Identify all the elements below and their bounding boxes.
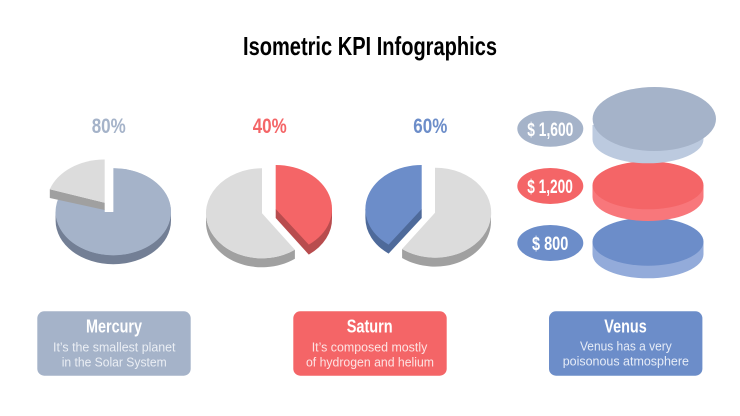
panel: Venus: poisonous atmosphere [563, 355, 689, 369]
pill: $ 1,200: $ 1,200 [527, 177, 573, 198]
panel: Saturn: Saturn [347, 317, 393, 337]
pill: $ 800: $ 800 [532, 234, 568, 255]
cylinder: red [592, 161, 704, 221]
pie chart: 60% Venus [365, 165, 491, 267]
panel: Mercury: It’s the smallest planet [53, 341, 176, 355]
pie chart: 80% Mercury [50, 159, 171, 264]
title: Isometric KPI Infographics [243, 31, 497, 61]
cylinder: grey-blue [592, 87, 716, 163]
KPI value: 80%: 80% [92, 115, 126, 138]
panel: Mercury: Mercury [86, 317, 142, 337]
pill: $ 800 [517, 225, 583, 261]
KPI value: 40%: 40% [253, 115, 287, 138]
panel: Mercury: in the Solar System [62, 355, 167, 369]
pie chart: 40% Saturn [206, 165, 332, 267]
pill: $ 1,200 [517, 168, 583, 204]
panel: Saturn [293, 311, 447, 376]
cylinder: blue [592, 218, 704, 278]
panel: Venus: Venus [604, 317, 647, 337]
panel: Saturn: It’s composed mostly [312, 341, 428, 355]
panel: Mercury [37, 311, 191, 376]
stacked cylinders [592, 87, 716, 278]
panel: Saturn: of hydrogen and helium [306, 355, 434, 369]
pill: $ 1,600 [517, 111, 583, 147]
panel: Venus: Venus has a very [580, 340, 672, 354]
KPI value: 60%: 60% [413, 115, 448, 138]
panel: Venus [549, 311, 702, 376]
pill: $ 1,600: $ 1,600 [527, 120, 573, 141]
